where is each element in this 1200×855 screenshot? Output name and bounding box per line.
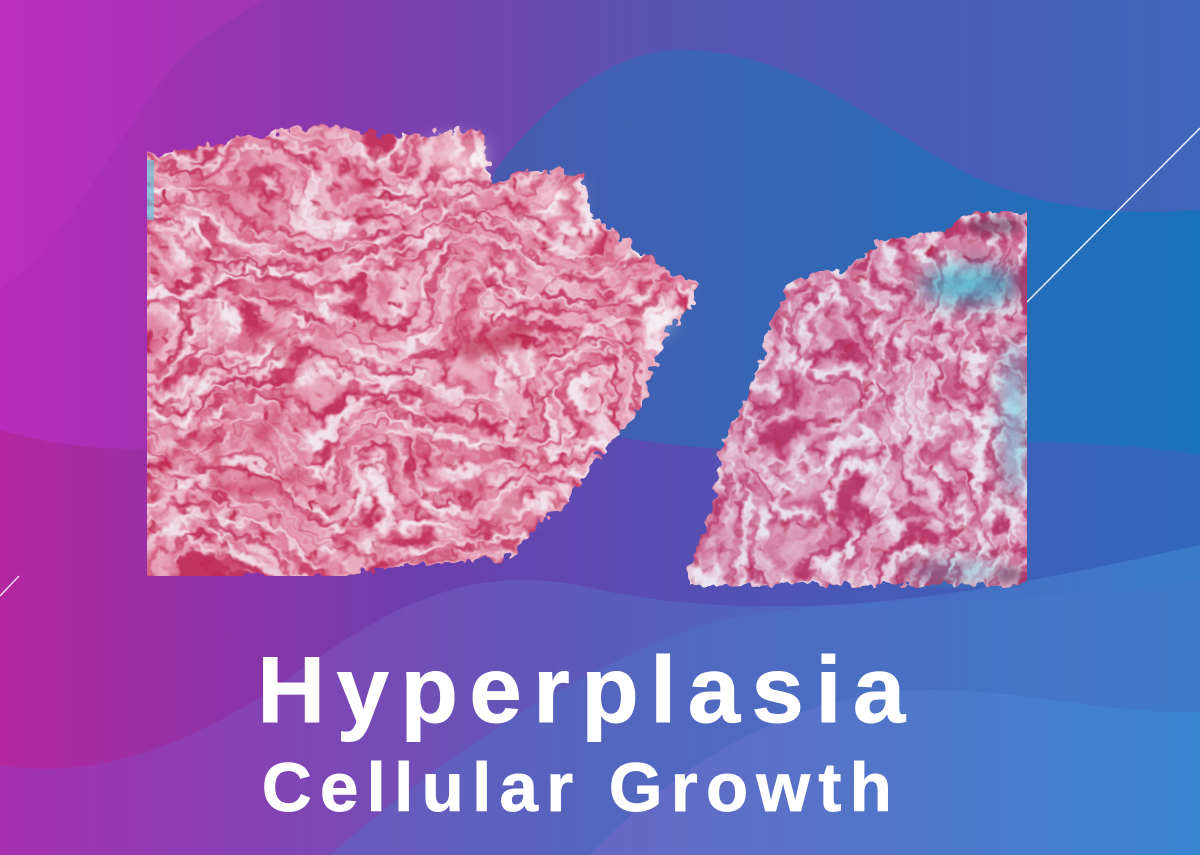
dark specks at corners xyxy=(967,217,1024,583)
title: Hyperplasia xyxy=(257,637,917,742)
teal staining xyxy=(905,265,1026,580)
pale patches xyxy=(425,141,669,520)
tissue sample: small xyxy=(686,212,1040,585)
tissue sample: large xyxy=(135,125,694,578)
dark red cluster and folds xyxy=(160,330,520,491)
decorative line: upper right xyxy=(1026,128,1200,303)
decorative line: left xyxy=(0,576,19,596)
pale blue left edge xyxy=(147,160,154,220)
subtitle: Cellular Growth xyxy=(262,749,900,826)
